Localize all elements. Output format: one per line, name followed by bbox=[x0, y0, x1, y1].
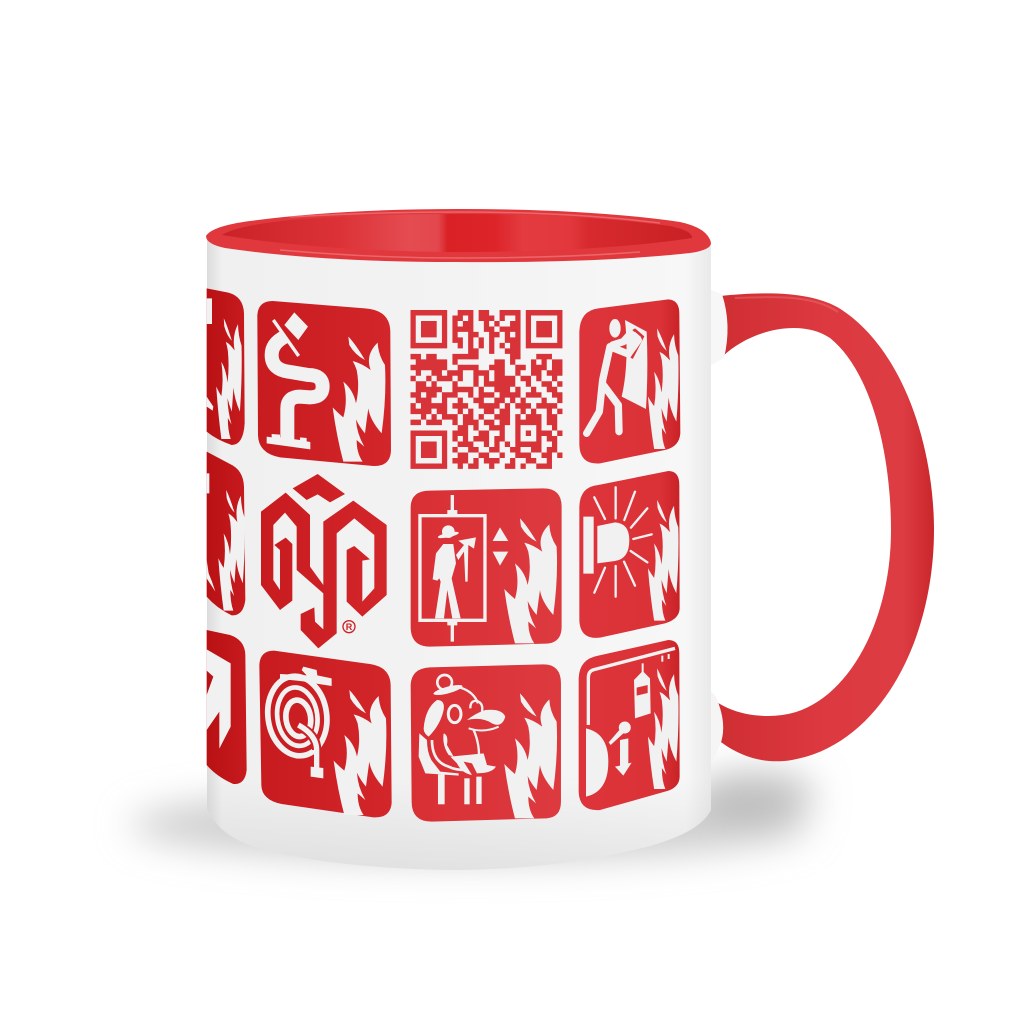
icon: standpipe bbox=[267, 312, 323, 449]
mug body bbox=[207, 236, 711, 870]
icon: person holding blanket bbox=[587, 319, 647, 433]
icon: pipe, canister, person and arrow bbox=[586, 648, 675, 797]
logo with registered mark, row 2 column 2 bbox=[261, 474, 387, 648]
mug rim and red interior bbox=[206, 209, 711, 262]
icon tile: hose pipe and fire, row 1 column 2 bbox=[257, 301, 391, 466]
icon: hose reel bbox=[263, 667, 332, 778]
icon tile: arrow, row 3 column 1 bbox=[207, 630, 247, 784]
registered mark bbox=[343, 621, 355, 633]
icon: siren with rays bbox=[583, 487, 652, 597]
icon tile: siren light and fire, row 2 column 4 bbox=[579, 471, 680, 638]
icon tile: fire hose reel and fire, row 3 column 2 bbox=[259, 651, 392, 817]
icon tile: extinguisher system and fire, row 3 column 4 bbox=[579, 640, 680, 810]
icon tile: sitting dog with hat and fire, row 3 column 3 bbox=[411, 664, 561, 822]
icon tile: partial, row 1 column 1 bbox=[207, 288, 245, 445]
icon: elevator with firefighter bbox=[420, 495, 508, 642]
icon tile: person with blanket and fire, row 1 column 4 bbox=[579, 299, 680, 463]
registered mark: R bbox=[346, 622, 353, 632]
icon: dog on chair bbox=[419, 675, 505, 804]
QR code bbox=[410, 310, 562, 469]
icon tile: firefighter in elevator and fire, row 2 column 3 bbox=[411, 488, 562, 647]
icon tile: partial, row 2 column 1 bbox=[207, 452, 245, 615]
mug handle bbox=[706, 288, 934, 775]
drop shadow under mug bbox=[130, 771, 815, 861]
